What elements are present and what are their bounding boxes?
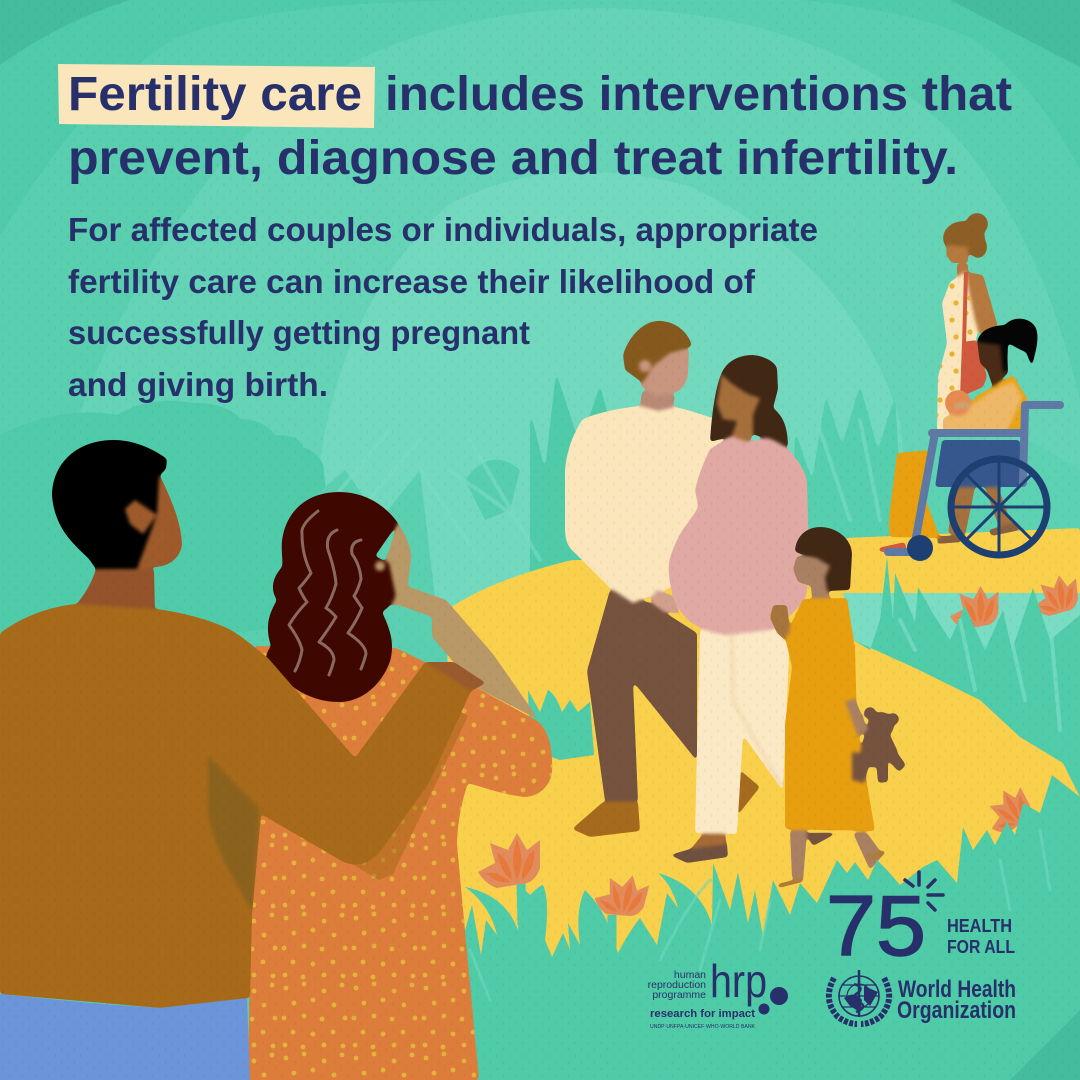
body text: and giving birth. bbox=[68, 366, 328, 403]
small grass clump left of the walking man bbox=[528, 690, 594, 760]
logo: World Health Organization emblem and wordmark: Organization bbox=[897, 997, 1016, 1024]
title: Fertility care bbox=[68, 68, 362, 121]
logo: World Health Organization emblem and wordmark bbox=[829, 970, 1016, 1024]
figure: standing woman with dotted dress and bag bbox=[937, 213, 998, 432]
logo: 75 health for all: 75 bbox=[826, 879, 926, 974]
title highlight behind "Fertility care" bbox=[58, 64, 375, 128]
logo: 75 health for all: HEALTH bbox=[947, 916, 1012, 936]
logo: World Health Organization emblem and wordmark: World Health bbox=[898, 976, 1016, 1003]
logo: human reproduction programme: UNDP·UNFPA·UNICEF·WHO·WORLD BANK bbox=[650, 1024, 756, 1030]
grass blades in the path bend bbox=[853, 557, 1080, 797]
body text: For affected couples or individuals, appropriate bbox=[68, 211, 818, 248]
title: includes interventions that bbox=[385, 68, 1012, 121]
figure: woman from behind with orange dotted dress bbox=[248, 492, 552, 1080]
body text bbox=[68, 211, 818, 403]
figure: man from behind with arm around woman bbox=[0, 440, 486, 1080]
foreground grass with spiky edge bbox=[448, 775, 1080, 1080]
logo: 75 health for all bbox=[826, 872, 1015, 974]
tulip right of wheelchair bbox=[950, 586, 998, 629]
tulip in foreground centre bbox=[592, 868, 651, 950]
logo: human reproduction programme: research for impact bbox=[650, 1008, 755, 1020]
tulip in foreground left bbox=[478, 833, 540, 925]
title bbox=[68, 68, 1012, 185]
grass patch inside the path bend bbox=[843, 593, 1080, 797]
logo: 75 health for all: FOR ALL bbox=[947, 937, 1015, 957]
body text: fertility care can increase their likelihood of bbox=[68, 263, 756, 300]
logo: human reproduction programme: human bbox=[674, 969, 706, 981]
figure: man in cream sweater bbox=[565, 321, 760, 837]
logo: human reproduction programme: programme bbox=[652, 989, 706, 1001]
logo: human reproduction programme bbox=[648, 955, 788, 1030]
figure: pregnant woman in pink sweater bbox=[669, 355, 809, 863]
figure: woman in wheelchair holding baby bbox=[878, 319, 1060, 561]
figure: child in yellow dress with teddy bear bbox=[770, 527, 906, 886]
title: prevent, diagnose and treat infertility. bbox=[68, 132, 958, 185]
tulip on the path right bbox=[979, 783, 1037, 839]
logo: human reproduction programme: reproduction bbox=[648, 979, 706, 991]
background bushes and grass behind the figures bbox=[0, 372, 1080, 660]
tulip far right bbox=[1031, 573, 1080, 617]
body text: successfully getting pregnant bbox=[68, 314, 530, 351]
logo: human reproduction programme: hrp bbox=[710, 955, 767, 1007]
yellow winding path bbox=[447, 528, 1080, 960]
